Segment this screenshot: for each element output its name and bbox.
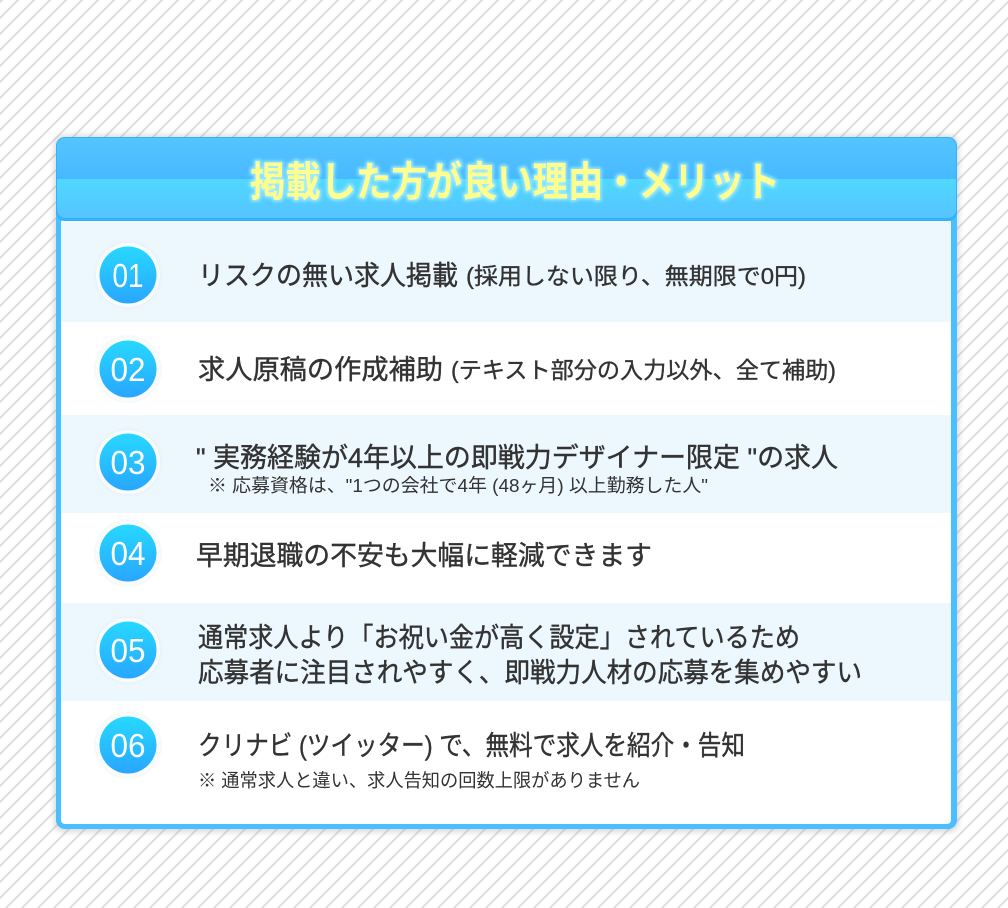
badge 03 (94, 428, 162, 496)
title: 掲載した方が良い理由・メリット (250, 159, 780, 205)
badge 06 (94, 712, 162, 778)
badge 06: 06 (110, 727, 146, 764)
item 05 text (198, 623, 862, 688)
item 06 text (198, 731, 745, 791)
item 02 text: 求人原稿の作成補助 (198, 355, 443, 385)
item 03 text (196, 443, 838, 496)
row stripe 3 (61, 415, 951, 513)
badge 05: 05 (110, 632, 146, 669)
header bar (56, 137, 957, 221)
item 03 text: " 実務経験が4年以上の即戦力デザイナー限定 "の求人 (196, 443, 838, 473)
item 01 text: (採用しない限り、無期限で0円) (466, 263, 806, 289)
row stripe 1 (61, 222, 951, 322)
badge 04 (94, 520, 162, 586)
item 04 text: 早期退職の不安も大幅に軽減できます (196, 541, 652, 571)
badge 02: 02 (110, 351, 146, 388)
badge 03: 03 (110, 444, 146, 481)
badge 01: 01 (112, 257, 144, 294)
panel: merit list (54, 135, 959, 832)
title: 掲載した方が良い理由・メリット (250, 159, 780, 205)
badge 04: 04 (110, 535, 146, 572)
item 01 text: リスクの無い求人掲載 (198, 261, 458, 291)
item 02 text (198, 355, 836, 385)
panel body (61, 219, 951, 824)
panel shadow (54, 135, 959, 832)
item 05 text: 通常求人より「お祝い金が高く設定」されているため (198, 623, 800, 653)
item 03 text: ※ 応募資格は、"1つの会社で4年 (48ヶ月) 以上勤務した人" (208, 475, 708, 496)
row stripe 5 (61, 603, 951, 701)
item 01 text (198, 261, 806, 291)
item 02 text: (テキスト部分の入力以外、全て補助) (451, 357, 836, 383)
panel frame (56, 137, 957, 829)
item 05 text: 応募者に注目されやすく、即戦力人材の応募を集めやすい (198, 658, 862, 688)
badge 01 (94, 242, 162, 308)
badge 02 (94, 336, 162, 402)
item 06 text: クリナビ (ツイッター) で、無料で求人を紹介・告知 (198, 731, 745, 761)
badge 05 (94, 616, 162, 684)
item 06 text: ※ 通常求人と違い、求人告知の回数上限がありません (198, 770, 640, 791)
